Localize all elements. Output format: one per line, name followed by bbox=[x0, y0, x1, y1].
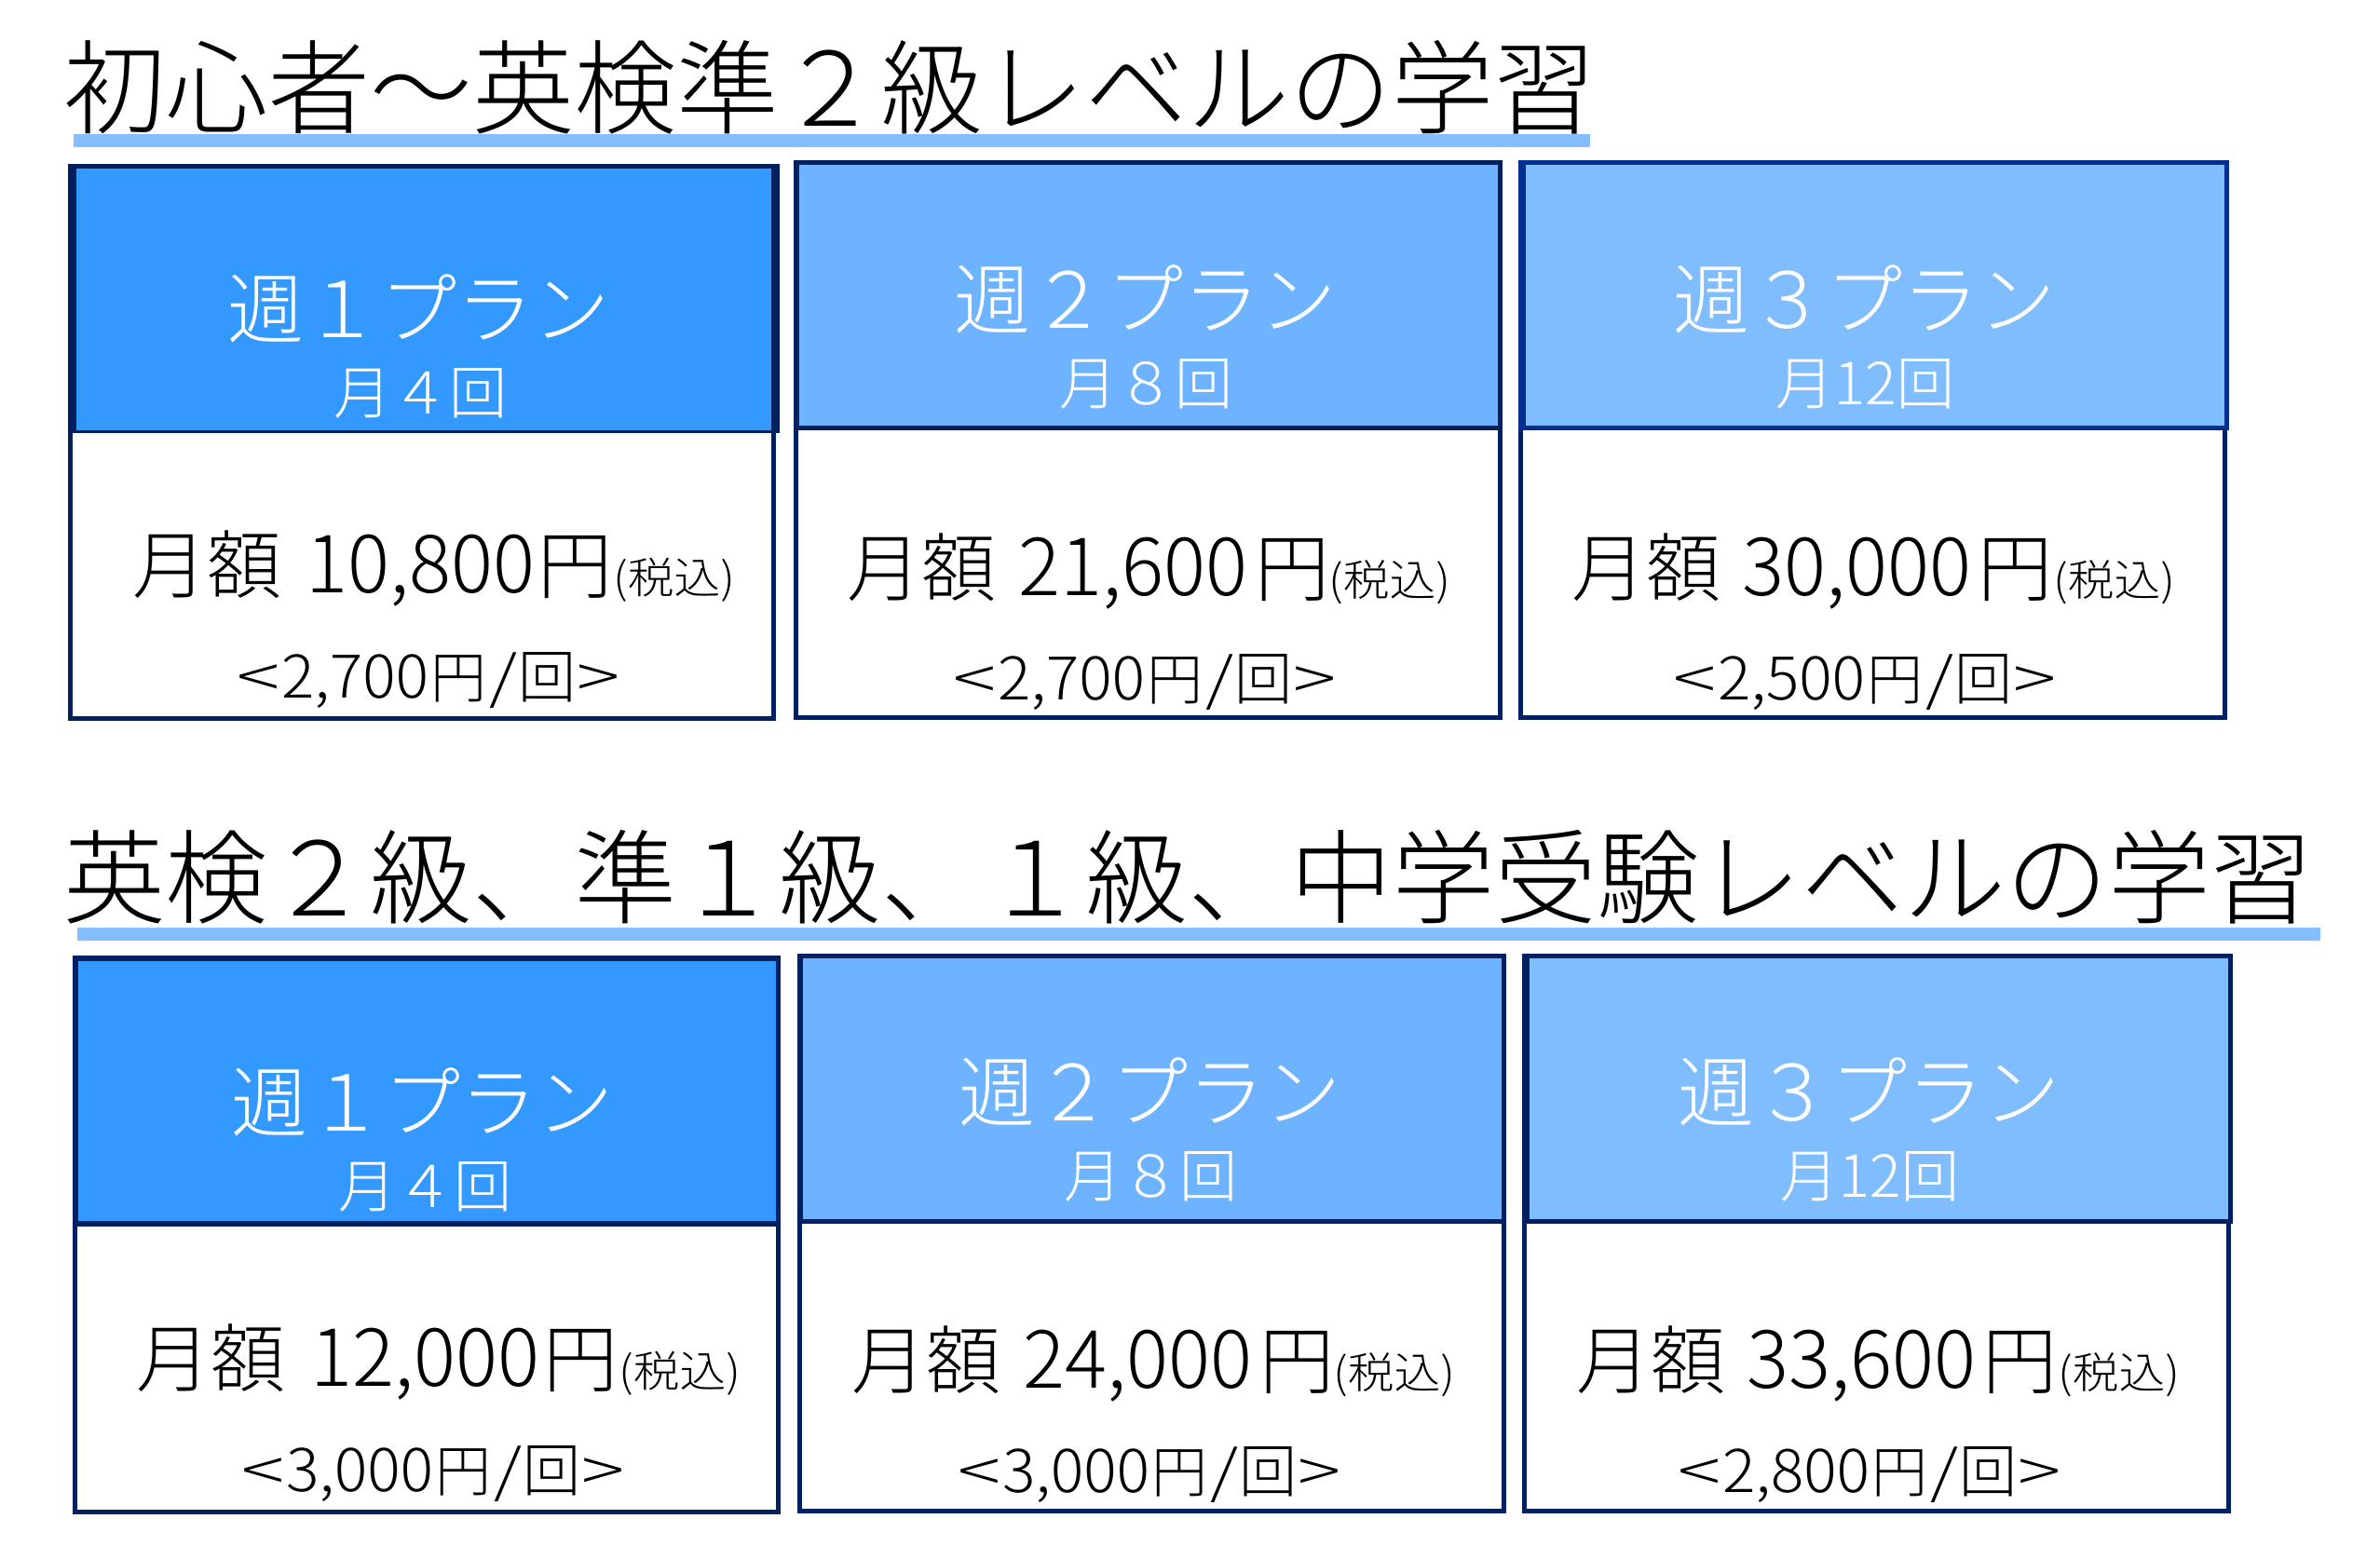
monthly price bbox=[132, 503, 735, 616]
price per lesson: / bbox=[489, 631, 517, 714]
price per lesson: 回 bbox=[523, 1424, 580, 1508]
monthly price: 円 bbox=[1982, 1302, 2057, 1410]
panel: weekly 3 plan bbox=[1518, 160, 2229, 717]
plan name: 週１プラン bbox=[227, 248, 609, 359]
monthly price: 24,000 bbox=[1023, 1298, 1252, 1411]
monthly price: 12,000 bbox=[310, 1296, 539, 1409]
price per lesson: 2,800 bbox=[1722, 1425, 1870, 1510]
monthly price: (税込) bbox=[2058, 1339, 2180, 1401]
monthly price: 月額 bbox=[851, 1302, 1000, 1410]
price per lesson: 円 bbox=[430, 633, 486, 714]
monthly price: (税込) bbox=[1333, 1339, 1455, 1401]
price per lesson bbox=[1678, 1425, 2060, 1510]
panel: weekly 2 plan bbox=[797, 954, 1506, 1511]
monthly price: 30,000 bbox=[1742, 506, 1971, 618]
panel: weekly 1 plan bbox=[73, 956, 781, 1512]
monthly price: (税込) bbox=[1328, 548, 1450, 609]
monthly price bbox=[1571, 506, 2175, 618]
price per lesson: / bbox=[1930, 1425, 1958, 1509]
monthly price: (税込) bbox=[619, 1338, 741, 1400]
price per lesson: 回 bbox=[1959, 1425, 2017, 1509]
price per lesson: < bbox=[241, 1424, 284, 1508]
price per lesson: 2,700 bbox=[998, 632, 1145, 717]
title underline bbox=[74, 134, 1590, 147]
price per lesson: 円 bbox=[435, 1427, 491, 1508]
plan name: 週２プラン bbox=[959, 1031, 1340, 1143]
price per lesson: 2,700 bbox=[281, 631, 428, 715]
price per lesson: 円 bbox=[1147, 635, 1203, 716]
monthly price bbox=[1576, 1298, 2180, 1411]
price per lesson: / bbox=[494, 1424, 522, 1508]
price per lesson bbox=[241, 1424, 624, 1509]
price per lesson: 3,000 bbox=[286, 1424, 433, 1509]
plan name: 週２プラン bbox=[954, 238, 1336, 350]
section: Eiken 2 and above, exam level bbox=[63, 796, 2320, 1512]
price per lesson: 回 bbox=[518, 631, 576, 714]
price per lesson: 円 bbox=[1867, 635, 1923, 716]
monthly price: 10,800 bbox=[306, 503, 535, 616]
title: beginner level: 初心者〜英検準２級レベルの学習 bbox=[63, 7, 1596, 156]
monthly price: 月額 bbox=[132, 507, 281, 615]
price per lesson: 2,500 bbox=[1718, 632, 1865, 717]
price per lesson: 回 bbox=[1239, 1425, 1297, 1509]
frequency: 月12回 bbox=[1780, 1130, 1959, 1214]
price per lesson bbox=[1673, 632, 2056, 717]
section: beginner to Eiken pre-2 bbox=[63, 7, 2229, 719]
price per lesson: 円 bbox=[1871, 1428, 1927, 1509]
plan name: 週１プラン bbox=[231, 1041, 613, 1153]
monthly price bbox=[847, 506, 1450, 618]
frequency: 月４回 bbox=[338, 1140, 511, 1224]
price per lesson: > bbox=[581, 1424, 624, 1508]
monthly price: 円 bbox=[537, 507, 612, 615]
panel: weekly 1 plan bbox=[68, 164, 780, 719]
price per lesson bbox=[953, 632, 1336, 717]
frequency: 月８回 bbox=[1059, 337, 1232, 421]
price per lesson: < bbox=[958, 1425, 1000, 1509]
monthly price: (税込) bbox=[613, 545, 735, 606]
monthly price: 円 bbox=[1978, 509, 2052, 617]
price per lesson: < bbox=[1678, 1425, 1720, 1509]
price per lesson: / bbox=[1205, 632, 1233, 716]
price per lesson: < bbox=[237, 631, 279, 714]
monthly price: 円 bbox=[1259, 1302, 1334, 1410]
price per lesson: > bbox=[1293, 632, 1336, 716]
frequency: 月12回 bbox=[1775, 337, 1954, 421]
price per lesson: 回 bbox=[1954, 632, 2012, 716]
price per lesson: 3,000 bbox=[1002, 1425, 1149, 1510]
frequency: 月８回 bbox=[1064, 1130, 1237, 1214]
plan name: 週３プラン bbox=[1673, 238, 2055, 350]
title: advanced level: 英検２級、準１級、１級、中学受験レベルの学習 bbox=[63, 796, 2312, 945]
price per lesson: 回 bbox=[1234, 632, 1292, 716]
price per lesson: 円 bbox=[1151, 1428, 1207, 1509]
monthly price: (税込) bbox=[2053, 548, 2175, 609]
title underline bbox=[77, 928, 2320, 941]
price per lesson: < bbox=[953, 632, 996, 716]
price per lesson: > bbox=[2018, 1425, 2060, 1509]
price per lesson: < bbox=[1673, 632, 1716, 716]
price per lesson bbox=[958, 1425, 1340, 1510]
monthly price: 月額 bbox=[136, 1300, 285, 1408]
price per lesson: / bbox=[1925, 632, 1953, 716]
monthly price bbox=[136, 1296, 741, 1409]
monthly price: 月額 bbox=[1576, 1302, 1725, 1410]
monthly price: 33,600 bbox=[1747, 1298, 1976, 1411]
monthly price: 21,600 bbox=[1018, 506, 1247, 618]
monthly price: 月額 bbox=[1571, 509, 1720, 617]
plan name: 週３プラン bbox=[1678, 1031, 2060, 1143]
price per lesson bbox=[237, 631, 619, 715]
price per lesson: > bbox=[2013, 632, 2056, 716]
monthly price: 円 bbox=[543, 1300, 618, 1408]
monthly price bbox=[851, 1298, 1455, 1411]
monthly price: 月額 bbox=[847, 509, 996, 617]
monthly price: 円 bbox=[1255, 509, 1329, 617]
price per lesson: / bbox=[1210, 1425, 1238, 1509]
panel: weekly 2 plan bbox=[794, 160, 1503, 717]
frequency: 月４回 bbox=[333, 346, 507, 430]
price per lesson: > bbox=[1298, 1425, 1340, 1509]
panel: weekly 3 plan bbox=[1522, 954, 2233, 1511]
price per lesson: > bbox=[577, 631, 619, 714]
